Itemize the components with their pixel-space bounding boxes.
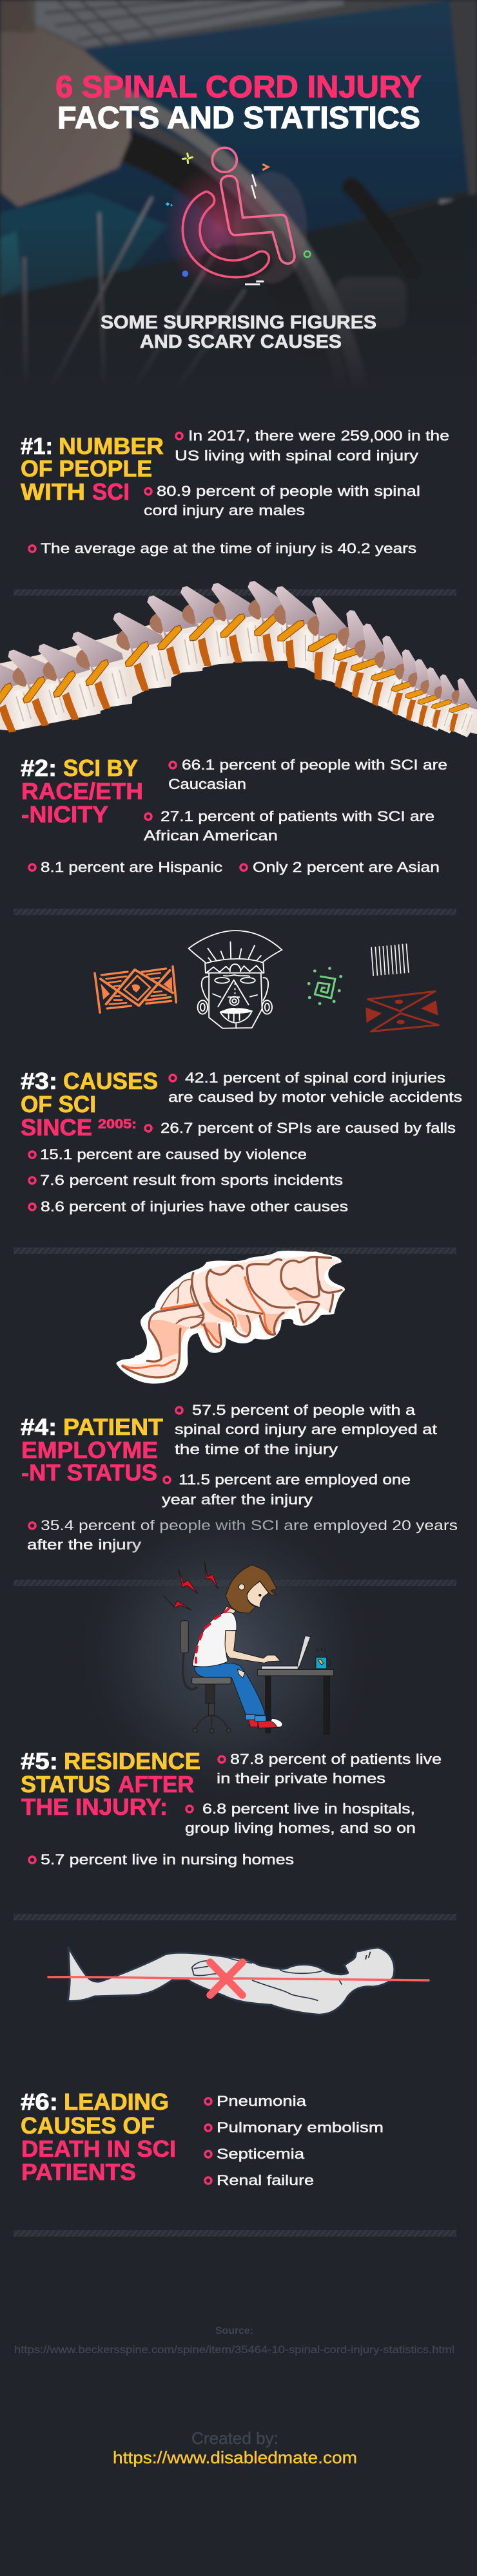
text: employed one year after: 11.5 percent are employed one [179, 1472, 411, 1488]
text: Hispanic: 8.1 percent are Hispanic [41, 859, 222, 875]
heading: SCI by race/ethnicity: #2: [21, 755, 57, 781]
text: employed at time of injury: spinal cord injury are employed at [175, 1421, 438, 1437]
panel: section 1 number of people [21, 428, 449, 556]
text: hospitals: 6.8 percent live in hospitals, [202, 1801, 415, 1817]
heading: causes of SCI since 2005: #3: [21, 1068, 57, 1094]
text: hospitals [185, 1801, 416, 1836]
icon: red X mark [210, 1962, 242, 1995]
heading: SCI by race/ethnicity: SCI BY [63, 755, 138, 781]
text: employed at time of injury [175, 1402, 438, 1457]
text: motor vehicle accidents: are caused by motor vehicle accidents [168, 1089, 462, 1105]
text: employed at time of injury: 57.5 percent of people with a [192, 1402, 416, 1418]
text: Caucasian: Caucasian [168, 776, 246, 792]
text: sports incidents: 7.6 percent result from sports incidents [40, 1172, 343, 1188]
heading: patient employment status: EMPLOYME [21, 1437, 158, 1463]
text: private homes [217, 1751, 442, 1786]
heading: number of people with SCI: OF PEOPLE [21, 455, 152, 482]
icon: desk [266, 1675, 330, 1734]
icon: white tribal mask [189, 931, 282, 1028]
heading: leading causes of death: CAUSES OF [21, 2112, 155, 2139]
subtitle: SOME SURPRISING FIGURES [101, 312, 376, 333]
text: falls: 26.7 percent of SPIs are caused by falls [161, 1120, 456, 1136]
icon: laptop [262, 1636, 311, 1669]
heading: number of people with SCI: NUMBER [59, 433, 164, 459]
credit text: Created by: [191, 2429, 278, 2448]
panel: section 2 race and ethnicity [21, 755, 447, 875]
heading: patient employment status: PATIENT [63, 1414, 163, 1440]
icon: red pattern [365, 991, 438, 1032]
text: Caucasian [168, 757, 447, 792]
heading: causes of SCI since 2005: 2005: [98, 1117, 137, 1132]
heading: residence status after injury: THE INJURY: [21, 1794, 168, 1820]
illustration: human spine [0, 581, 477, 739]
heading: residence status after injury: AFTER [118, 1771, 194, 1797]
text: employed one year after [162, 1472, 411, 1508]
icon: office chair [180, 1621, 231, 1733]
text: private homes: in their private homes [217, 1770, 385, 1786]
icon: man's torso and arm [192, 1606, 280, 1667]
source text: https://www.beckersspine.com/spine/item/35464-10-spinal-cord-injury-statistics.html [14, 2344, 454, 2356]
text: African American: 27.1 percent of patients with SCI are [161, 808, 434, 824]
source text [14, 2325, 454, 2356]
title: 6 SPINAL CORD INJURY [55, 70, 422, 104]
heading: number of people with SCI: #1: [21, 433, 53, 459]
heading: patient employment status: -NT STATUS [21, 1459, 157, 1486]
text: 259,000 living with injury: In 2017, there were 259,000 in the [188, 428, 449, 444]
heading: SCI by race/ethnicity [21, 755, 143, 828]
heading: leading causes of death: DEATH IN SCI [21, 2136, 176, 2162]
text: 259,000 living with injury: US living with spinal cord injury [175, 448, 419, 464]
panel: section 4 employment [21, 1402, 458, 1553]
text: employed 20 years after: 35.4 percent of people with SCI are employed 20 years [41, 1517, 458, 1533]
text: 80.9 percent males: 80.9 percent of people with spinal [157, 483, 420, 499]
panel: section 5 residence [21, 1748, 442, 1868]
text: motor vehicle accidents: 42.1 percent of spinal cord injuries [185, 1070, 445, 1086]
heading: residence status after injury: RESIDENCE [64, 1748, 200, 1774]
heading: causes of SCI since 2005: SINCE [21, 1114, 92, 1141]
heading: patient employment status [21, 1414, 163, 1486]
heading: leading causes of death: #6: [21, 2088, 58, 2115]
illustration: spine segment sticker [116, 1251, 345, 1383]
heading: residence status after injury [21, 1748, 200, 1820]
icon: red horizontal line [48, 1977, 429, 1980]
illustration: tribal mask and patterns [95, 931, 438, 1032]
text: 80.9 percent males [144, 483, 420, 518]
text: pneumonia: Pneumonia [217, 2093, 307, 2109]
text: septicemia: Septicemia [217, 2146, 305, 2162]
heading: number of people with SCI: SCI [92, 478, 130, 505]
heading: causes of SCI since 2005: OF SCI [21, 1091, 96, 1117]
heading: SCI by race/ethnicity: -NICITY [21, 801, 108, 828]
text: African American [144, 808, 434, 844]
title [55, 70, 422, 135]
text: violence: 15.1 percent are caused by violence [40, 1146, 307, 1162]
text: nursing homes: 5.7 percent live in nursing homes [41, 1852, 294, 1868]
icon: man's legs and shoes [195, 1663, 282, 1728]
heading: causes of SCI since 2005: CAUSES [63, 1068, 158, 1094]
text: average age: The average age at the time of injury is 40.2 years [41, 540, 416, 556]
heading: number of people with SCI [21, 433, 164, 505]
text: 259,000 living with injury [175, 428, 449, 464]
icon: glowing wheelchair symbol [163, 147, 310, 292]
text: renal failure: Renal failure [217, 2172, 314, 2188]
text: 80.9 percent males: cord injury are males [144, 502, 305, 518]
icon: tea mug [316, 1648, 330, 1669]
heading: SCI by race/ethnicity: RACE/ETH [21, 778, 143, 804]
heading: causes of SCI since 2005 [21, 1068, 158, 1141]
heading: leading causes of death [21, 2088, 176, 2185]
text: motor vehicle accidents [168, 1070, 462, 1105]
text: employed at time of injury: the time of the injury [175, 1441, 338, 1457]
icon: man's head [226, 1565, 277, 1613]
heading: number of people with SCI: WITH [21, 478, 85, 505]
heading: leading causes of death: PATIENTS [21, 2159, 136, 2185]
credit text: https://www.disabledmate.com [113, 2448, 357, 2467]
icon: green spiral [307, 967, 342, 1005]
text: Caucasian: 66.1 percent of people with SCI are [182, 757, 447, 773]
subtitle: AND SCARY CAUSES [140, 332, 342, 352]
source text: Source: [215, 2325, 253, 2336]
icon: white stripes [371, 943, 409, 976]
text: private homes: 87.8 percent of patients live [230, 1751, 442, 1767]
text: employed 20 years after [27, 1517, 458, 1553]
text: Asian: Only 2 percent are Asian [253, 859, 440, 875]
icon: orange pattern [95, 967, 176, 1012]
panel: section 3 causes [21, 1068, 462, 1215]
subtitle [101, 312, 376, 352]
illustration: lying body with red line and X [48, 1947, 429, 2014]
text: other causes: 8.6 percent of injuries have other causes [41, 1198, 348, 1215]
text: African American: African American [144, 828, 278, 844]
heading: patient employment status: #4: [21, 1414, 57, 1440]
text: hospitals: group living homes, and so on [185, 1820, 416, 1836]
title: FACTS AND STATISTICS [57, 101, 420, 135]
icon: pain lightning bolts [164, 1561, 218, 1610]
heading: residence status after injury: STATUS [21, 1771, 110, 1797]
heading: residence status after injury: #5: [21, 1748, 58, 1774]
panel: section 6 causes of death [21, 2088, 384, 2188]
panel: hero photo of wheelchair [0, 0, 477, 365]
credit text [113, 2429, 357, 2467]
heading: leading causes of death: LEADING [64, 2088, 169, 2115]
illustration: man hunched over laptop with back pain [68, 1494, 384, 1810]
text: employed one year after: year after the injury [162, 1492, 313, 1508]
text: pulmonary embolism: Pulmonary embolism [217, 2119, 384, 2136]
text: employed 20 years after: after the injury [27, 1537, 142, 1553]
